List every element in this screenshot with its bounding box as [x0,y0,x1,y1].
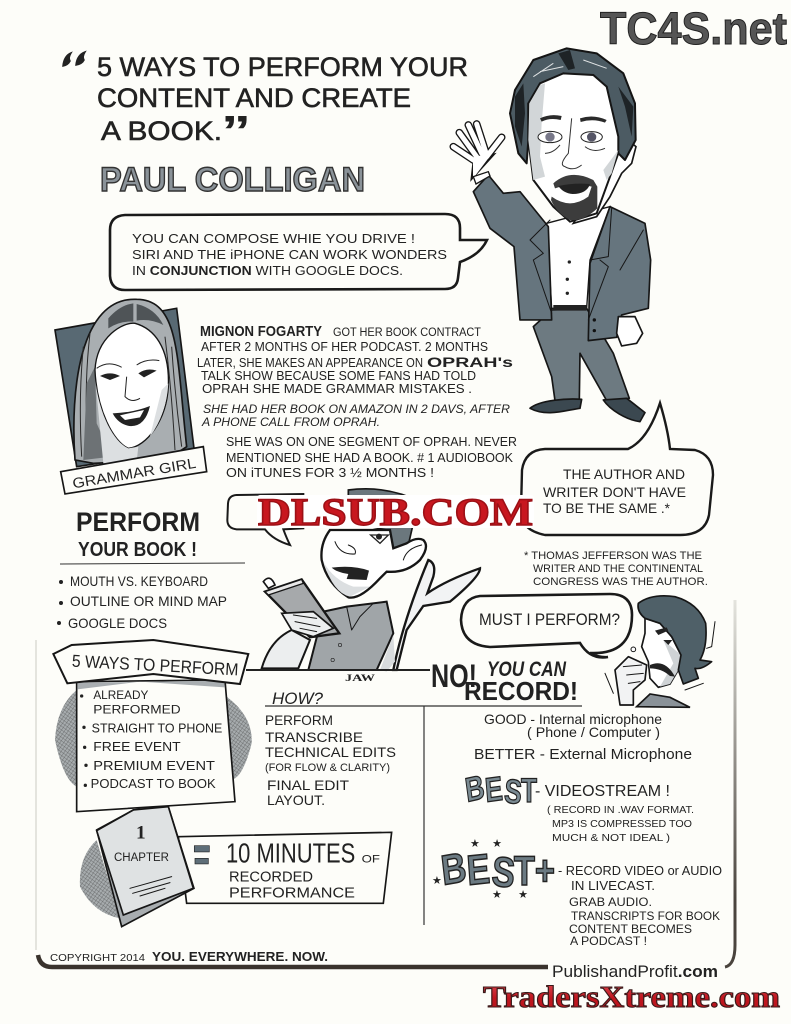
text block: Mignon Fogarty story: AFTER 2 MONTHS OF HER PODCAST. 2 MONTHS [201,340,488,354]
pants [533,308,629,401]
equals sign [194,846,209,864]
bullet list: performing tools: OUTLINE OR MIND MAP [70,593,227,609]
good: internal microphone: GOOD - Internal microphone [484,711,662,727]
text block: Mignon Fogarty story: SHE WAS ON ONE SEGMENT OF OPRAH. NEVER [226,435,517,449]
best plus: livecast: TRANSCRIPTS FOR BOOK [571,909,720,923]
list: how: FINAL EDIT [267,777,349,793]
text block: Mignon Fogarty story [197,323,517,480]
name tag [61,447,207,494]
best plus: livecast: IN LIVECAST. [571,879,655,893]
hand on book [282,612,333,637]
panel: 5 ways to perform: STRAIGHT TO PHONE [92,721,222,735]
text block: Mignon Fogarty story: MENTIONED SHE HAD A BOOK. # 1 AUDIOBOOK [226,451,514,465]
title: CONTENT AND CREATE [97,83,411,113]
shoes [530,399,582,413]
bullet list: performing tools: MOUTH VS. KEYBOARD [70,573,208,589]
neck and ear [573,142,636,223]
panel: 5 ways to perform: ALREADY [93,688,148,702]
speech bubble: compose while driving [110,214,487,290]
exclamation: no you can record [431,658,578,706]
eye [371,535,388,543]
list: how: (FOR FLOW & CLARITY) [265,762,390,774]
face [528,73,618,222]
best: video stream: MUCH & NOT IDEAL ) [552,832,670,844]
good: internal microphone: ( Phone / Computer ) [527,724,660,740]
watermark: TradersXtreme.com: TradersXtreme.com [483,979,780,1014]
eye bags and nose [545,118,605,169]
watermark: DLSUB.COM: DLSUB.COM [258,491,533,534]
name tag: GRAMMAR GIRL [71,456,197,492]
speech bubble: author and writer [521,403,713,535]
footnote: Thomas Jefferson: CONGRESS WAS THE AUTHOR. [533,576,708,588]
exclamation: no you can record: NO! [431,658,477,694]
title [63,52,468,156]
artist signature: JAW [345,673,375,683]
better: external microphone: BETTER - External Microphone [474,746,692,763]
callout: 1 chapter equals 10 minutes: 10 MINUTES [226,838,355,869]
lowered hand [617,317,643,346]
text block: Mignon Fogarty story: A PHONE CALL FROM OPRAH. [201,415,380,429]
speech bubble: author and writer: TO BE THE SAME .* [543,500,671,516]
eyes [538,131,562,143]
list: how [265,689,396,808]
exclamation: no you can record: YOU CAN [487,658,567,681]
panel frame [36,600,735,967]
speech bubble: compose while driving: SIRI AND THE iPHONE CAN WORK WONDERS [132,247,447,262]
text block: Mignon Fogarty story: SHE HAD HER BOOK ON AMAZON IN 2 DAVS, AFTER [203,402,510,416]
head [321,530,426,598]
stars: ★ ★ [470,838,502,850]
jacket right side [588,207,651,341]
best plus: livecast: GRAB AUDIO. [569,895,652,909]
panel: 5 ways to perform: PERFORMED [93,702,181,716]
best plus: livecast: CONTENT BECOMES [569,922,692,936]
best plus: livecast: A PODCAST ! [570,934,647,948]
hair [510,48,636,163]
opening quote marks [63,52,85,66]
brow, eye and mouth [650,627,675,677]
speech bubble: must I perform [461,594,632,657]
dark frame [55,308,194,467]
text block: Mignon Fogarty story: ON iTUNES FOR 3 ½ MONTHS ! [226,466,434,480]
logo: TC4S.net: TC4S.net [600,3,787,54]
best plus: livecast: BEST+ [438,844,555,896]
list items [80,694,83,698]
best: video stream [462,769,694,844]
text block: Mignon Fogarty story: TALK SHOW BECAUSE SOME FANS HAD TOLD [201,369,476,383]
list: how: HOW? [272,689,324,708]
best: video stream: - VIDEOSTREAM ! [535,783,670,800]
book [97,807,194,927]
smile [113,406,150,426]
text block: Mignon Fogarty story: MIGNON FOGARTY [200,323,322,340]
speech bubble fragment [227,494,303,545]
site credit: PublishandProfit.com: PublishandProfit.com [552,962,718,981]
speech bubble: compose while driving: IN CONJUNCTION WITH GOOGLE DOCS. [132,263,403,278]
copyright line [50,949,328,964]
jacket left side and raised arm [473,175,552,320]
heading: perform your book: PERFORM [76,507,200,537]
book: CHAPTER [114,850,169,864]
speech bubble: compose while driving: YOU CAN COMPOSE WHIE YOU DRIVE ! [132,231,415,246]
title: 5 WAYS TO PERFORM YOUR [97,52,468,82]
callout: 1 chapter equals 10 minutes: RECORDED [229,869,313,885]
shirt [308,602,393,670]
footnote: Thomas Jefferson [524,550,708,588]
book: 1 [136,823,146,844]
text block: Mignon Fogarty story: OPRAH's [427,355,513,370]
callout: 1 chapter equals 10 minutes: OF [362,854,381,866]
footnote: Thomas Jefferson: WRITER AND THE CONTINENTAL [533,563,703,575]
title: A BOOK. [101,116,222,146]
eyes and brows [100,369,157,380]
raised hand [453,124,502,184]
text block: Mignon Fogarty story: GOT HER BOOK CONTRACT [333,327,481,339]
forearm left sleeve [262,630,310,668]
nose and ear [320,542,422,560]
brows [540,115,607,123]
heading: perform your book [60,507,245,564]
speech bubble: author and writer: WRITER DON'T HAVE [543,484,686,500]
hair [74,299,187,463]
callout: 1 chapter equals 10 minutes: PERFORMANCE [229,885,355,901]
panel: 5 ways to perform: FREE EVENT [93,740,181,754]
bullet list: performing tools [57,573,227,631]
best plus: livecast: ★ [432,875,442,887]
raised arm and hand [393,560,480,670]
best: video stream: ( RECORD IN .WAV FORMAT. [547,804,694,816]
shirt [637,694,690,707]
list: how: LAYOUT. [267,792,325,808]
speech bubble: author and writer: THE AUTHOR AND [563,466,685,482]
list card [77,680,235,812]
copyright line: COPYRIGHT 2014 [50,953,145,964]
goatee [551,175,597,220]
title: ” [221,107,251,156]
list: how: TRANSCRIBE [265,729,363,745]
panel: 5 ways to perform: PODCAST TO BOOK [91,777,216,791]
panel: 5 ways to perform [53,640,252,812]
list: how: PERFORM [265,712,333,728]
worry lines [605,622,715,693]
best: video stream: BEST [462,769,537,812]
face [95,323,168,448]
hair [348,489,420,552]
author name: PAUL COLLIGAN [100,161,365,199]
box [178,832,392,903]
callout: 1 chapter equals 10 minutes [80,807,392,927]
best plus: livecast: ★ ★ [492,889,528,901]
banner [53,640,248,684]
cartoon: worried woman [605,596,715,707]
hatching [55,690,252,787]
text block: Mignon Fogarty story: LATER, SHE MAKES AN APPEARANCE ON [197,356,423,370]
footnote: Thomas Jefferson: * THOMAS JEFFERSON WAS THE [524,550,702,562]
panel: 5 ways to perform: PREMIUM EVENT [93,759,215,773]
panel: 5 ways to perform: 5 WAYS TO PERFORM [71,651,239,679]
good: internal microphone [484,711,662,740]
speech bubble: must I perform: MUST I PERFORM? [479,610,620,629]
heading: perform your book: YOUR BOOK ! [78,539,197,561]
mouth [558,184,590,194]
bullet list: performing tools: GOOGLE DOCS [68,615,167,631]
book [265,579,339,637]
hatching [80,840,120,918]
list: how: TECHNICAL EDITS [265,744,396,760]
best: video stream: MP3 IS COMPRESSED TOO [552,818,692,830]
shirt [547,207,610,308]
caricature: Paul Colligan [453,48,651,422]
portrait: Grammar Girl [55,299,207,494]
best plus: livecast: - RECORD VIDEO or AUDIO [558,863,722,878]
mouth [332,567,369,580]
hand at mouth [615,657,647,705]
text block: Mignon Fogarty story: OPRAH SHE MADE GRAMMAR MISTAKES . [202,382,472,396]
face [642,618,681,687]
best plus: livecast [432,838,722,948]
hair [638,596,712,684]
copyright line: YOU. EVERYWHERE. NOW. [152,949,328,964]
cartoon: man reading book [227,489,480,672]
exclamation: no you can record: RECORD! [464,676,578,706]
